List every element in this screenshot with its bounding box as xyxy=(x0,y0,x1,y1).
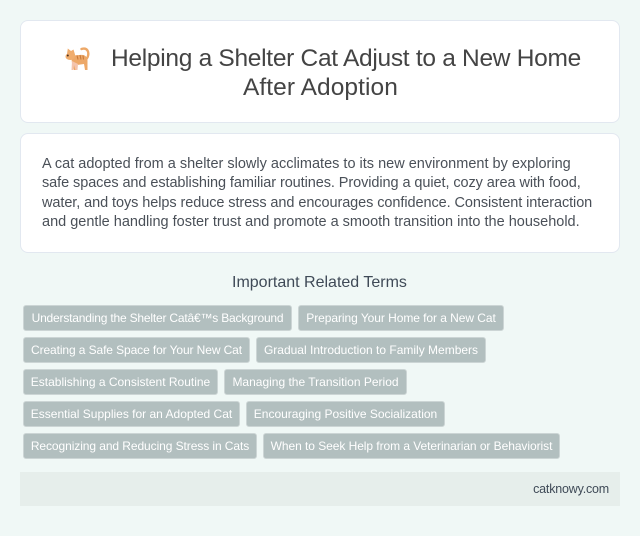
related term tags: Gradual Introduction to Family Members xyxy=(264,343,478,357)
related term tags: When to Seek Help from a Veterinarian or Behaviorist xyxy=(271,439,552,453)
description text: A cat adopted from a shelter slowly acclimates to its new environment by exploring xyxy=(42,156,571,172)
description text xyxy=(42,156,592,230)
related term tags: Managing the Transition Period xyxy=(232,375,399,389)
related term tags: Essential Supplies for an Adopted Cat xyxy=(31,407,232,421)
footer site name: catknowy.com xyxy=(533,482,609,496)
title panel xyxy=(20,20,620,123)
icon: cat xyxy=(66,47,90,70)
related term tags: Understanding the Shelter Catâ€™s Background xyxy=(32,311,283,325)
description text: water, and toys helps reduce stress and encourages confidence. Consistent interaction xyxy=(42,195,592,211)
footer bar xyxy=(20,472,620,506)
related term tags: Creating a Safe Space for Your New Cat xyxy=(31,343,242,357)
title line 1: Helping a Shelter Cat Adjust to a New Home xyxy=(111,45,581,72)
related term tags xyxy=(23,305,560,459)
related term tags: Establishing a Consistent Routine xyxy=(31,375,210,389)
related term tags: Recognizing and Reducing Stress in Cats xyxy=(31,439,249,453)
description panel xyxy=(20,133,620,253)
description text: safe spaces and establishing familiar routines. Providing a quiet, cozy area with food, xyxy=(42,175,581,191)
title line 2: After Adoption xyxy=(243,74,398,101)
related term tags: Encouraging Positive Socialization xyxy=(254,407,437,421)
related term tags: Preparing Your Home for a New Cat xyxy=(306,311,496,325)
section heading: Important Related Terms xyxy=(232,274,407,291)
description text: and gentle handling foster trust and promote a smooth transition into the household. xyxy=(42,214,580,230)
